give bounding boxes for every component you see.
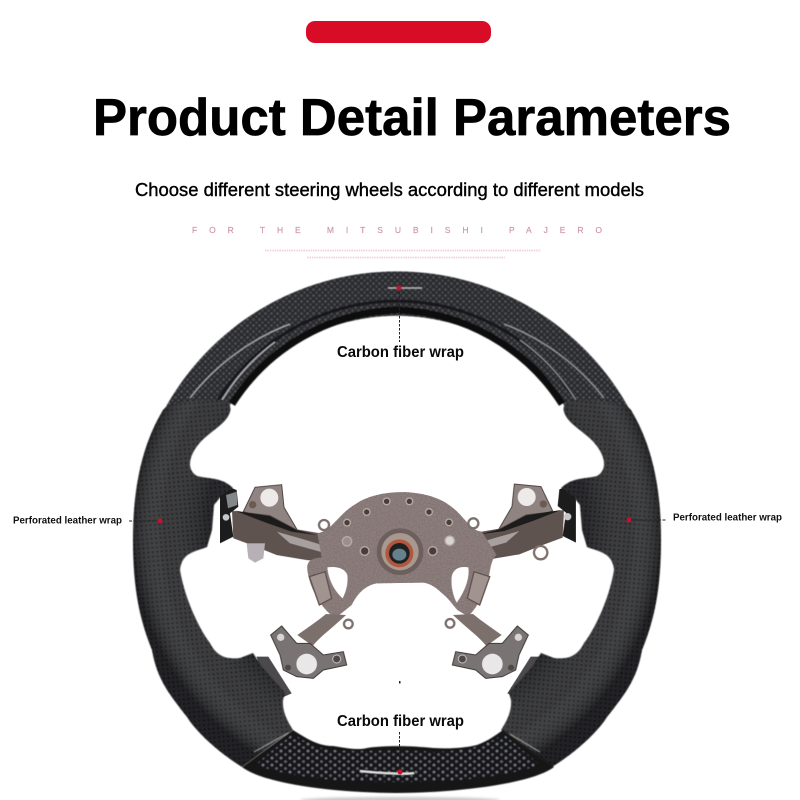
upper left bracket and arm — [220, 483, 350, 563]
callout: bottom carbon fiber wrap — [337, 681, 464, 774]
upper right bracket and arm — [446, 483, 576, 562]
lower left clip and bracket — [257, 572, 347, 700]
callout: bottom carbon fiber wrap: Carbon fiber wrap — [337, 713, 464, 730]
fine print lines, illegible in the source — [265, 250, 541, 258]
hub and spokes — [220, 483, 576, 700]
red pill accent — [306, 21, 491, 43]
callout: right perforated leather wrap — [626, 512, 782, 524]
callout: top carbon fiber wrap — [337, 286, 464, 361]
white gaps between plate and legs — [327, 567, 469, 603]
bottom carbon fiber rim — [242, 730, 554, 793]
steering wheel — [133, 271, 661, 800]
model caption: FOR THE MITSUBISHI PAJERO — [192, 225, 602, 235]
callout: right perforated leather wrap: Perforated leather wrap — [673, 512, 782, 524]
plate bolt holes — [342, 498, 454, 555]
lower right clip and bracket — [452, 572, 542, 700]
central plate — [307, 492, 497, 618]
callout: left perforated leather wrap: Perforated leather wrap — [13, 516, 122, 526]
callout: top carbon fiber wrap: Carbon fiber wrap — [337, 344, 464, 361]
left perforated leather grip — [133, 400, 293, 767]
central bore — [377, 528, 423, 575]
subtitle: Choose different steering wheels according to different models — [135, 179, 644, 200]
title: Product Detail Parameters — [93, 89, 731, 147]
top carbon fiber rim — [163, 271, 631, 412]
plate tabs — [319, 518, 547, 628]
shadow under wheel — [300, 797, 500, 800]
right perforated leather grip — [501, 400, 661, 767]
